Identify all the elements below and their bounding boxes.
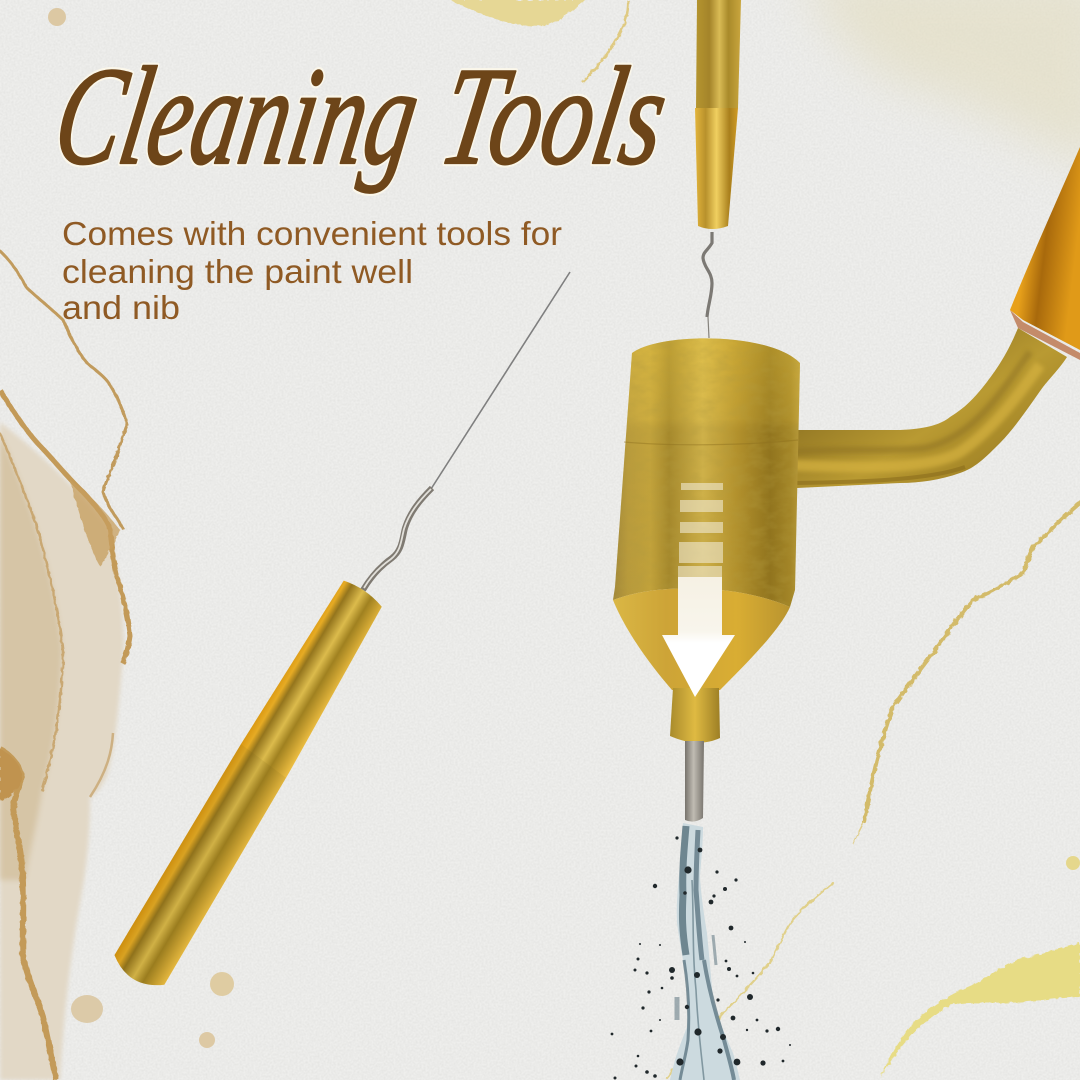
neck bbox=[670, 688, 720, 743]
description text: Comes with convenient tools for bbox=[62, 215, 562, 252]
needle wire bbox=[431, 272, 570, 489]
wire sleeve bbox=[363, 488, 432, 590]
description text bbox=[62, 215, 562, 326]
metal nib bbox=[685, 741, 704, 822]
title: Cleaning bbox=[45, 38, 430, 194]
orange pen handle bbox=[1010, 147, 1080, 360]
title: Tools bbox=[431, 38, 678, 194]
description text: and nib bbox=[62, 289, 180, 326]
description text: cleaning the paint well bbox=[62, 253, 413, 290]
brass paint well bbox=[610, 335, 805, 822]
title: Cleaning bbox=[45, 38, 430, 194]
watercolor: right gold vein bbox=[667, 503, 1080, 1078]
white down arrow bbox=[662, 483, 735, 697]
ink droplets bbox=[611, 836, 791, 1080]
brass handle bbox=[109, 576, 389, 994]
watercolor: top gold stroke bbox=[450, 0, 628, 82]
title: Tools bbox=[431, 38, 678, 194]
watercolor: top right wash bbox=[800, 0, 1080, 170]
brass elbow pipe bbox=[785, 328, 1067, 488]
water splash bbox=[611, 823, 791, 1080]
cleaning needle tool: diagonal bbox=[109, 272, 570, 994]
pen tip tool: top bbox=[695, 0, 741, 338]
watercolor: bottom right yellow wash bbox=[880, 943, 1080, 1078]
cone bbox=[613, 588, 790, 690]
cylinder bbox=[610, 335, 805, 610]
watercolor: left beige wash bbox=[0, 251, 130, 1080]
